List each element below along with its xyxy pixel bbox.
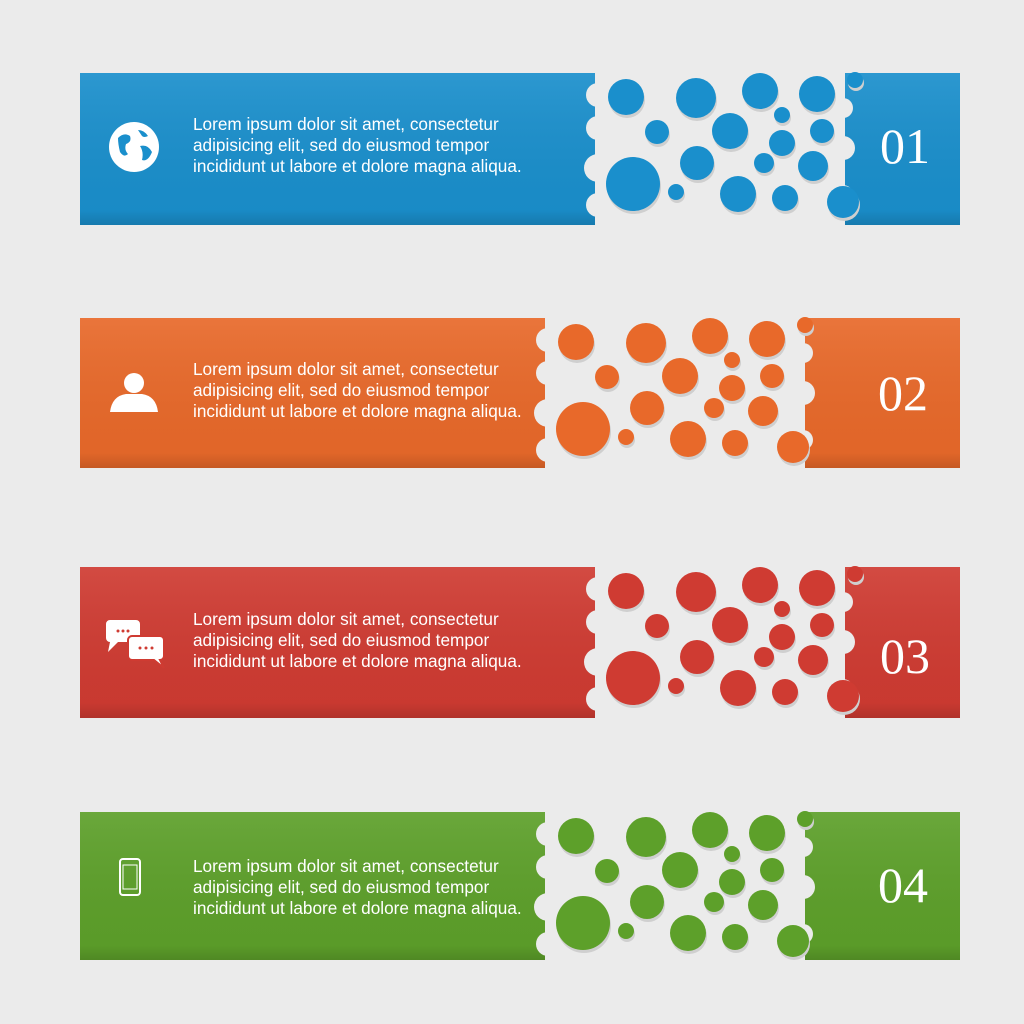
banner 2 bbox=[80, 317, 960, 468]
number 02: 02 bbox=[878, 365, 928, 421]
text 4: adipisicing elit, sed do eiusmod tempor bbox=[193, 877, 489, 897]
text 2: adipisicing elit, sed do eiusmod tempor bbox=[193, 380, 489, 400]
text 2: Lorem ipsum dolor sit amet, consectetur bbox=[193, 359, 499, 379]
icon: globe bbox=[109, 122, 159, 172]
text 4: incididunt ut labore et dolore magna aliqua. bbox=[193, 898, 522, 918]
banner 4 bbox=[80, 811, 960, 960]
icon: person bbox=[110, 373, 158, 412]
number 01: 01 bbox=[880, 118, 930, 174]
text 1: adipisicing elit, sed do eiusmod tempor bbox=[193, 135, 489, 155]
icon: phone bbox=[120, 859, 140, 895]
text 1 bbox=[193, 114, 522, 176]
text 3: Lorem ipsum dolor sit amet, consectetur bbox=[193, 609, 499, 629]
text 1: incididunt ut labore et dolore magna aliqua. bbox=[193, 156, 522, 176]
text 2 bbox=[193, 359, 522, 421]
text 2: incididunt ut labore et dolore magna aliqua. bbox=[193, 401, 522, 421]
icon: chat bubbles bbox=[106, 620, 164, 668]
number 04: 04 bbox=[878, 857, 928, 913]
text 3: adipisicing elit, sed do eiusmod tempor bbox=[193, 630, 489, 650]
banner 3 bbox=[80, 566, 960, 718]
text 1: Lorem ipsum dolor sit amet, consectetur bbox=[193, 114, 499, 134]
text 4 bbox=[193, 856, 522, 918]
text 3: incididunt ut labore et dolore magna aliqua. bbox=[193, 651, 522, 671]
banner 1 bbox=[80, 72, 960, 225]
text 4: Lorem ipsum dolor sit amet, consectetur bbox=[193, 856, 499, 876]
text 3 bbox=[193, 609, 522, 671]
number 03: 03 bbox=[880, 628, 930, 684]
